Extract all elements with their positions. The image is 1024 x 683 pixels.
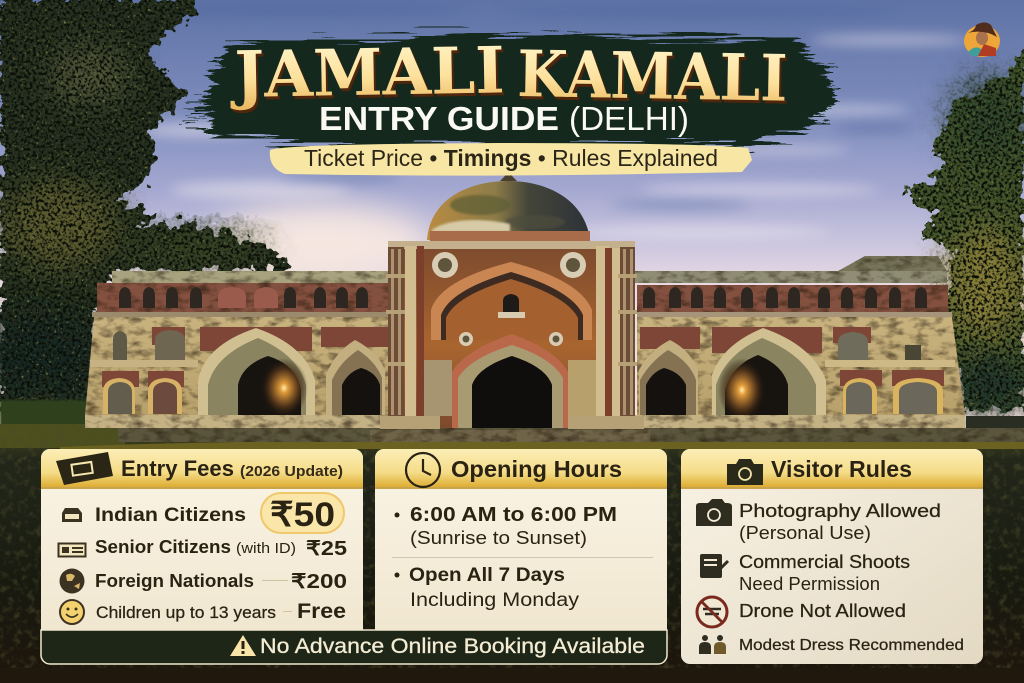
tagline: Ticket Price • Timings • Rules Explained: [304, 145, 718, 171]
row: foreign nationals: ₹200: [291, 571, 347, 593]
rule: photography: [696, 499, 941, 543]
icon: ticket: [56, 452, 113, 485]
building: Jamali Kamali mosque: [85, 173, 1024, 442]
row: senior citizens: ₹25: [306, 538, 347, 560]
panel: visitor rules: [681, 449, 983, 664]
entry fees header: Entry Fees: [121, 456, 234, 481]
row: children: [60, 600, 346, 624]
icon: clock: [406, 453, 440, 487]
entry fees header: (2026 Update): [240, 464, 343, 480]
days text: Including Monday: [410, 590, 580, 611]
row: children: Children up to 13 years: [96, 604, 276, 622]
row: Indian citizens: [62, 493, 344, 534]
trees left: [0, 0, 296, 410]
visitor rules header: [681, 449, 983, 489]
dome: [427, 173, 590, 241]
main title: KAMALI: [519, 40, 790, 120]
icon: camera: [727, 459, 763, 485]
panel: opening hours: [375, 449, 667, 639]
subtitle: ENTRY GUIDE: [319, 100, 559, 137]
visitor rules header: Visitor Rules: [771, 456, 912, 482]
main title: KAMALI: [517, 37, 788, 117]
opening hours header: Opening Hours: [451, 456, 622, 482]
rule: dress: Modest Dress Recommended: [739, 637, 964, 654]
row: foreign nationals: [60, 568, 347, 594]
base steps: [85, 415, 1024, 442]
row: senior citizens: (with ID): [236, 541, 296, 557]
subtitle: (DELHI): [569, 100, 689, 137]
booking notice banner: [41, 630, 667, 664]
central gateway: [380, 241, 644, 429]
sky background: [0, 0, 1024, 450]
booking notice banner: No Advance Online Booking Available: [260, 635, 645, 658]
row: senior citizens: Senior Citizens: [95, 537, 231, 557]
days text: [394, 565, 580, 611]
tree right: [905, 50, 1024, 413]
rule: photography: (Personal Use): [739, 522, 871, 543]
right wing: [635, 256, 965, 428]
left wing: [85, 271, 388, 428]
logo badge: [964, 22, 1000, 57]
rule: drone: Drone Not Allowed: [739, 600, 906, 621]
title banner: [182, 33, 838, 176]
main title: [229, 33, 790, 120]
hours text: (Sunrise to Sunset): [410, 528, 587, 548]
brush stroke backdrop: [182, 34, 838, 146]
row: children: Free: [297, 600, 346, 623]
hours text: 6:00 AM to 6:00 PM: [410, 504, 617, 526]
ground and grass: [0, 400, 1024, 683]
days text: Open All 7 Days: [409, 565, 565, 586]
rule: commercial shoots: Commercial Shoots: [739, 551, 910, 572]
row: senior citizens: [58, 537, 347, 560]
panel: entry fees: [41, 449, 363, 639]
row: Indian citizens: Indian Citizens: [95, 504, 246, 526]
main title: JAMALI: [229, 33, 505, 113]
rule: drone: [697, 597, 906, 627]
main title: JAMALI: [231, 36, 507, 116]
rule: photography: Photography Allowed: [739, 500, 941, 521]
row: foreign nationals: Foreign Nationals: [95, 571, 254, 591]
entry fees header: [41, 449, 363, 489]
rule: commercial shoots: Need Permission: [739, 573, 880, 594]
hours text: [394, 504, 617, 548]
yellow subtitle strip: [270, 143, 752, 176]
subtitle: [319, 100, 689, 137]
price pill ₹50: [261, 493, 344, 534]
icon: warning: [230, 635, 256, 656]
opening hours header: [375, 449, 667, 489]
rule: commercial shoots: [700, 551, 910, 594]
price pill ₹50: ₹50: [270, 496, 335, 534]
